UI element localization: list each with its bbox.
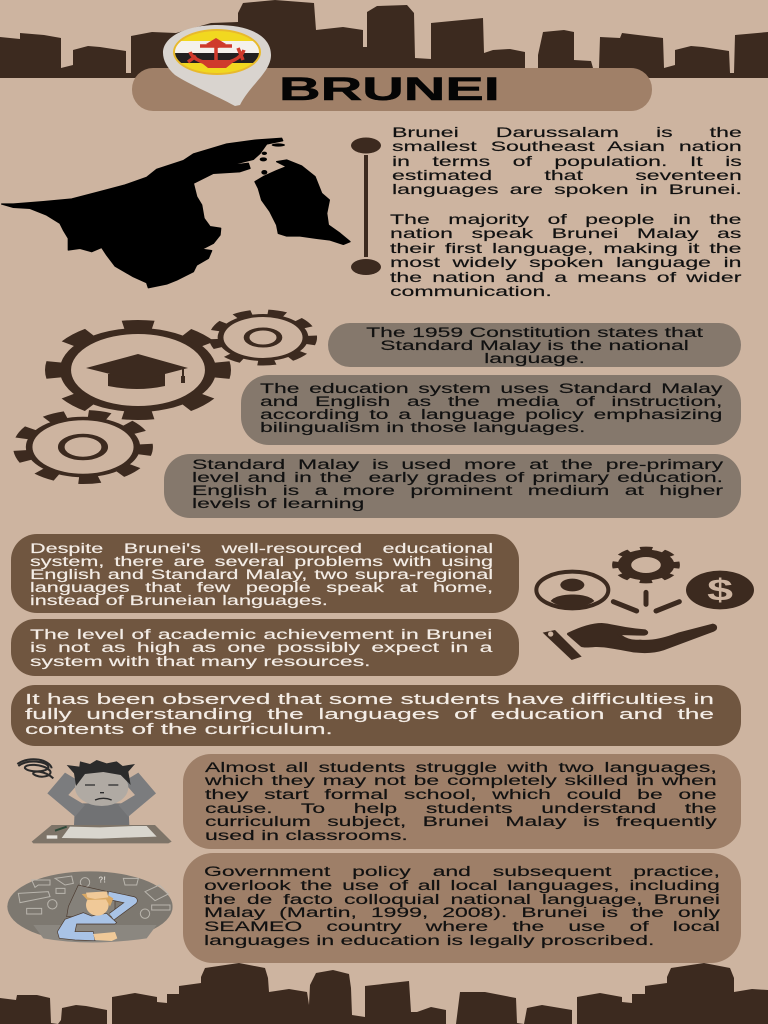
title banner <box>132 68 652 111</box>
text: legally proscribed: overlook the use of all local languages, including <box>204 878 720 893</box>
panel: struggling with two languages <box>183 754 741 849</box>
text: majority language <box>390 211 742 299</box>
text: curriculum difficulties <box>25 690 714 738</box>
text: constitution: Standard Malay is the national <box>380 338 689 353</box>
text: introduction: estimated that seventeen <box>392 167 742 183</box>
text: levels of learning: Standard Malay is used more at the pre-primary <box>192 456 723 472</box>
text: majority language: their first language, making it the <box>390 240 741 256</box>
text: majority language: nation speak Brunei Malay as <box>390 225 741 241</box>
panel: academic achievement <box>11 619 519 676</box>
text: supra-regional languages: instead of Bruneian languages. <box>30 592 328 608</box>
text: legally proscribed: languages in education is legally proscribed. <box>204 933 654 948</box>
text: supra-regional languages <box>30 540 493 608</box>
text: supra-regional languages: English and Standard Malay, two supra-regional <box>30 566 493 582</box>
text: Brunei Malay in classrooms: used in classrooms. <box>205 828 408 843</box>
text: constitution: language. <box>484 351 585 366</box>
text: levels of learning: English is a more prominent medium at higher <box>192 483 723 498</box>
text: Brunei Malay in classrooms <box>204 760 717 843</box>
text: legally proscribed: SEAMEO country where the use of local <box>204 919 720 934</box>
top skyline <box>0 0 768 78</box>
text: media of instruction <box>260 380 722 436</box>
text: majority language: the nation and a means of wider <box>390 269 741 285</box>
map of Brunei <box>1 138 351 288</box>
text: Brunei Malay in classrooms: curriculum subject, Brunei Malay is frequently <box>205 814 717 829</box>
text: Brunei Malay in classrooms: Almost all students struggle with two languages, <box>205 760 717 774</box>
icon: hand with person, gear and money <box>534 546 754 660</box>
panel: problems <box>11 534 519 613</box>
text: curriculum difficulties: contents of the curriculum. <box>25 720 333 738</box>
text: introduction: smallest Southeast Asian nation <box>392 138 742 154</box>
text: introduction: in terms of population. It is <box>392 153 742 169</box>
text: levels of learning: level and in the early grades of primary education. <box>192 470 723 485</box>
text: introduction <box>392 124 742 198</box>
icon: confused student with doodles <box>7 871 173 942</box>
text: Brunei Malay in classrooms: cause. To help students understand the <box>205 801 717 816</box>
text: supra-regional languages: system, there are several problems with using <box>30 554 493 568</box>
panel: primary education <box>164 454 741 518</box>
text: doodle symbols: ?! <box>98 876 106 885</box>
title: BRUNEI <box>279 71 500 107</box>
text: achievement: is not as high as one possibly expect in a <box>30 640 492 655</box>
text: constitution <box>366 324 703 366</box>
panel: education system <box>241 375 741 445</box>
text: levels of learning: levels of learning <box>192 496 364 511</box>
text: legally proscribed: the de facto colloquial national language, Brunei <box>204 892 720 907</box>
text: media of instruction: according to a language policy emphasizing <box>260 407 722 422</box>
text: media of instruction: and English as the media of instruction, <box>260 394 722 409</box>
text: constitution: The 1959 Constitution states that <box>366 324 703 340</box>
text: achievement: The level of academic achievement in Brunei <box>30 626 492 642</box>
text: supra-regional languages: languages that few people speak at home, <box>30 580 493 594</box>
text: dollar sign: $ <box>707 572 733 607</box>
text: curriculum difficulties: It has been observed that some students have difficulties in <box>25 690 714 708</box>
text: legally proscribed <box>204 864 720 948</box>
text: majority language: communication. <box>390 283 552 299</box>
text: legally proscribed: Malay (Martin, 1999, 2008). Brunei is the only <box>204 905 720 920</box>
text: supra-regional languages: Despite Brunei's well-resourced educational <box>30 540 493 556</box>
text: majority language: most widely spoken language in <box>390 254 741 270</box>
text: legally proscribed: Government policy and subsequent practice, <box>204 864 720 879</box>
icon: stressed student at desk <box>16 758 172 844</box>
icon: gears with graduation cap <box>14 310 317 484</box>
text: achievement: system with that many resources. <box>30 654 371 668</box>
text: levels of learning <box>192 456 724 512</box>
text: curriculum difficulties: fully understanding the languages of education and the <box>25 706 714 722</box>
icon: map pin with Brunei flag <box>162 25 271 106</box>
panel: national language <box>328 323 741 367</box>
panel: difficulties <box>11 685 741 746</box>
text: introduction: Brunei Darussalam is the <box>392 124 742 140</box>
connector: vertical bar with two dots <box>351 138 381 275</box>
text: media of instruction: bilingualism in those languages. <box>260 420 585 435</box>
panel: government policy <box>183 853 741 963</box>
text: Brunei Malay in classrooms: they start formal school, which could be one <box>205 787 717 802</box>
text: introduction: languages are spoken in Brunei. <box>392 181 742 197</box>
text: media of instruction: The education system uses Standard Malay <box>260 380 722 396</box>
bottom skyline <box>0 963 768 1024</box>
text: achievement <box>30 626 493 670</box>
text: majority language: The majority of people in the <box>390 211 741 227</box>
text: Brunei Malay in classrooms: which they may not be completely skilled in when <box>205 773 717 788</box>
